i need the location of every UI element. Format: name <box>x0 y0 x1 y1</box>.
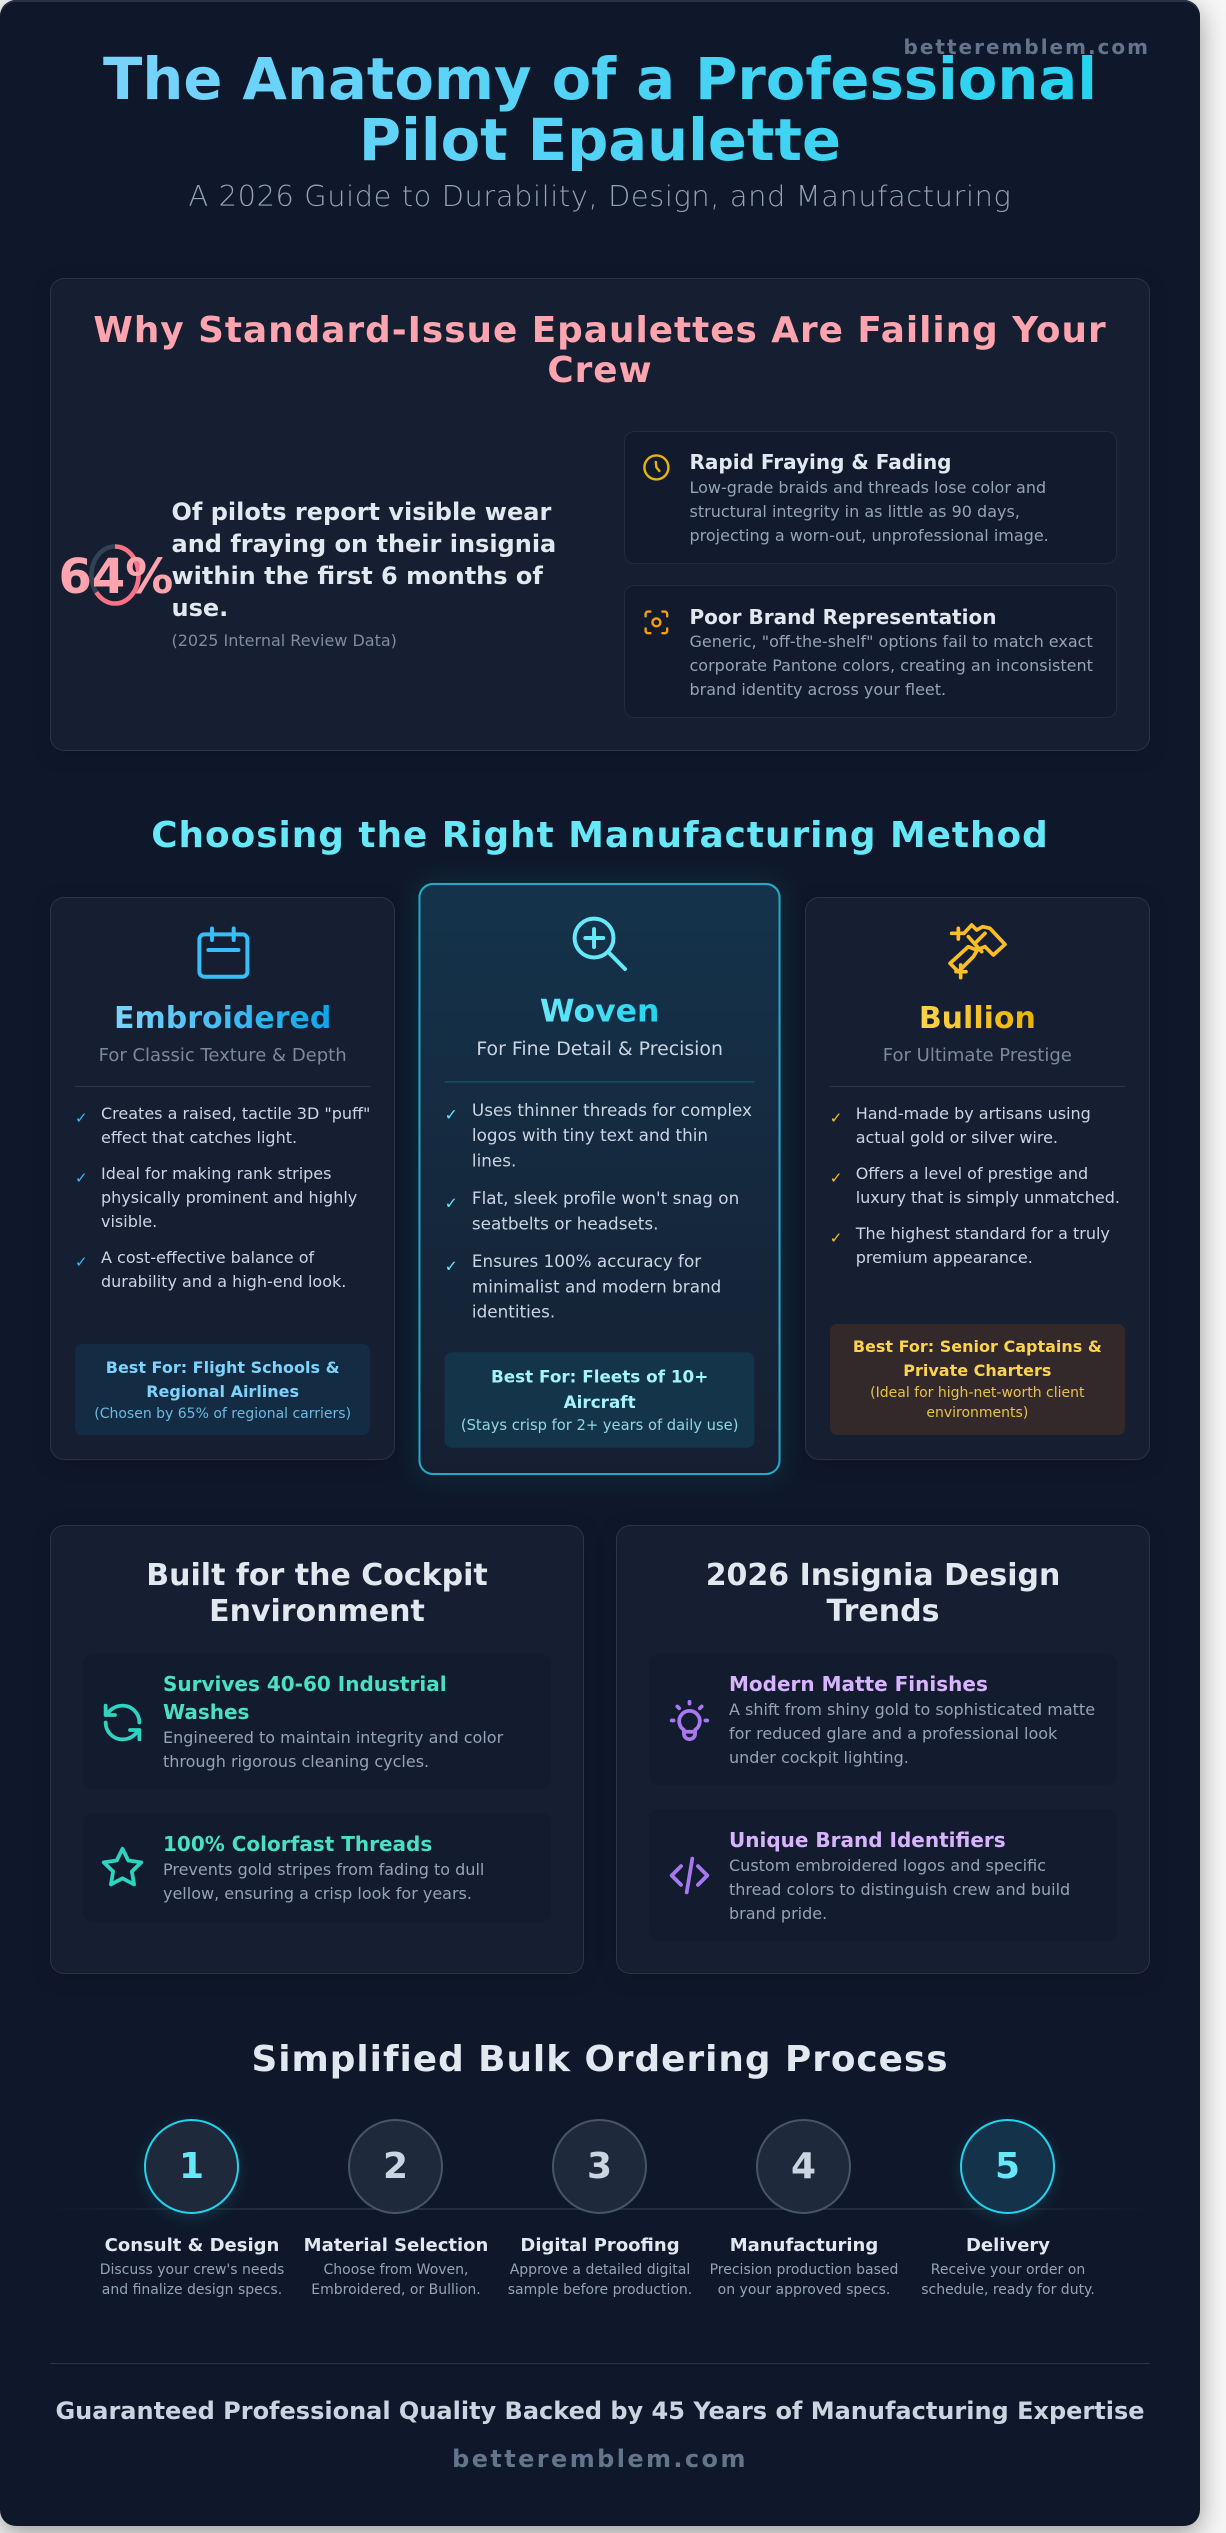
feature list: visible. <box>101 1212 157 1230</box>
method title: Bullion <box>919 1001 1036 1036</box>
issue card: poor brand representation <box>624 585 1116 718</box>
trend description: brand pride. <box>729 1904 827 1922</box>
step description: Receive your order on <box>931 2262 1085 2278</box>
best for callout: environments) <box>926 1405 1028 1421</box>
footer brand: betteremblem.com <box>452 2445 748 2473</box>
feature title: 100% Colorfast Threads <box>163 1832 432 1856</box>
icon: light bulb <box>670 1700 710 1742</box>
best for callout: Best For: Flight Schools & <box>106 1358 340 1376</box>
panel heading: Built for the Cockpit <box>146 1558 488 1593</box>
panel heading: Trends <box>826 1594 940 1629</box>
issue description <box>690 632 1093 699</box>
feature description: yellow, ensuring a crisp look for years. <box>163 1884 472 1902</box>
feature list: ✓ <box>830 1108 842 1126</box>
feature list: logos with tiny text and thin <box>472 1125 708 1145</box>
step description: sample before production. <box>508 2282 692 2298</box>
step description <box>100 2262 284 2298</box>
panel heading: Environment <box>209 1594 425 1629</box>
step description <box>508 2262 692 2298</box>
title: The Anatomy of a Professional <box>103 46 1097 113</box>
trend title: Modern Matte Finishes <box>729 1672 988 1696</box>
step number 1: 1 <box>179 2146 204 2187</box>
feature list: Uses thinner threads for complex <box>472 1100 752 1120</box>
feature list: Hand-made by artisans using <box>856 1104 1091 1122</box>
icon: refresh <box>104 1704 142 1742</box>
panel: built for the cockpit <box>50 1525 584 1974</box>
best for callout: Private Charters <box>903 1361 1051 1380</box>
feature description: Prevents gold stripes from fading to dull <box>163 1860 484 1878</box>
best for callout: Regional Airlines <box>146 1382 299 1400</box>
feature list: ✓ <box>830 1228 842 1246</box>
best for callout: (Chosen by 65% of regional carriers) <box>94 1406 351 1422</box>
step title: Manufacturing <box>730 2235 878 2256</box>
step number 3 <box>552 2119 647 2214</box>
icon: magnifier <box>572 916 628 972</box>
step description: Discuss your crew's needs <box>100 2262 284 2278</box>
stat description: and fraying on their insignia <box>172 530 556 558</box>
stat description: use. <box>172 594 228 622</box>
issue title: Rapid Fraying & Fading <box>690 450 952 474</box>
title: Pilot Epaulette <box>359 107 841 174</box>
step description: schedule, ready for duty. <box>921 2282 1095 2298</box>
step 3 <box>508 2119 692 2298</box>
feature list <box>830 1104 1120 1266</box>
card: woven (featured) <box>419 882 781 1474</box>
step number 3: 3 <box>587 2146 612 2187</box>
icon: scan <box>644 610 668 634</box>
section heading <box>93 310 1107 390</box>
feature list: luxury that is simply unmatched. <box>856 1188 1120 1206</box>
trend description: for reduced glare and a professional look <box>729 1724 1057 1742</box>
feature description: through rigorous cleaning cycles. <box>163 1752 429 1770</box>
step number 4: 4 <box>791 2146 816 2187</box>
feature title: Survives 40-60 Industrial <box>163 1672 447 1696</box>
trend description: under cockpit lighting. <box>729 1748 909 1766</box>
issue description: brand identity across your fleet. <box>690 680 946 699</box>
method subtitle: For Fine Detail & Precision <box>477 1038 723 1060</box>
best for callout: Best For: Fleets of 10+ <box>491 1366 709 1386</box>
trend description <box>729 1700 1095 1766</box>
feature list: Ideal for making rank stripes <box>101 1164 331 1182</box>
feature description <box>163 1728 504 1770</box>
method subtitle: For Ultimate Prestige <box>883 1044 1072 1066</box>
best for callout: Best For: Senior Captains & <box>853 1337 1102 1356</box>
best for callout: (Stays crisp for 2+ years of daily use) <box>461 1416 739 1433</box>
section heading: Why Standard-Issue Epaulettes Are Failing Your <box>93 310 1107 350</box>
feature list: ✓ <box>75 1168 88 1186</box>
stat description: within the first 6 months of <box>172 562 543 590</box>
trend description: Custom embroidered logos and specific <box>729 1856 1046 1874</box>
icon: code <box>670 1856 710 1894</box>
feature list: identities. <box>472 1301 555 1321</box>
feature list: ✓ <box>830 1168 842 1186</box>
issue description: corporate Pantone colors, creating an inconsistent <box>690 656 1093 675</box>
step description: Approve a detailed digital <box>510 2262 690 2278</box>
feature list <box>75 1104 370 1290</box>
step 4 <box>710 2119 898 2298</box>
best for callout <box>445 1352 755 1447</box>
trend description <box>729 1856 1070 1922</box>
panel heading: 2026 Insignia Design <box>706 1558 1060 1593</box>
stat description <box>172 498 556 622</box>
trend: brand identifiers <box>649 1809 1117 1941</box>
feature list: actual gold or silver wire. <box>856 1128 1058 1146</box>
section heading: Crew <box>547 350 653 390</box>
step number 5 <box>960 2119 1055 2214</box>
feature list: lines. <box>472 1150 517 1170</box>
step description <box>710 2262 898 2298</box>
footer guarantee: Guaranteed Professional Quality Backed by 45 Years of Manufacturing Expertise <box>55 2397 1145 2425</box>
trend title: Unique Brand Identifiers <box>729 1828 1006 1852</box>
stat source: (2025 Internal Review Data) <box>172 630 397 650</box>
panel: design trends <box>616 1525 1150 1974</box>
feature list: seatbelts or headsets. <box>472 1213 659 1233</box>
panel heading <box>146 1558 488 1629</box>
watermark: betteremblem.com <box>904 34 1150 58</box>
section heading: bulk ordering: Simplified Bulk Ordering Process <box>251 2039 949 2080</box>
step number 2 <box>348 2119 443 2214</box>
feature list: durability and a high-end look. <box>101 1272 346 1290</box>
card: bullion <box>805 896 1150 1460</box>
step description: Embroidered, or Bullion. <box>311 2282 481 2298</box>
feature list: ✓ <box>445 1193 458 1212</box>
best for callout <box>75 1344 370 1435</box>
step title: Delivery <box>966 2235 1050 2256</box>
section heading: manufacturing method: Choosing the Right Manufacturing Method <box>151 815 1049 856</box>
feature list: ✓ <box>75 1252 88 1270</box>
feature title: Washes <box>163 1700 249 1724</box>
step number 5: 5 <box>995 2146 1020 2187</box>
card: embroidered <box>50 896 395 1460</box>
feature list: effect that catches light. <box>101 1128 297 1146</box>
feature list: ✓ <box>75 1108 88 1126</box>
feature: industrial washes <box>83 1654 551 1789</box>
step description: Precision production based <box>710 2262 898 2278</box>
best for callout: Aircraft <box>564 1391 636 1411</box>
subtitle: A 2026 Guide to Durability, Design, and Manufacturing <box>189 179 1011 213</box>
best for callout <box>830 1324 1125 1435</box>
feature list: ✓ <box>445 1105 458 1124</box>
step description: Choose from Woven, <box>324 2262 468 2278</box>
feature: colorfast threads <box>83 1813 551 1922</box>
feature list: A cost-effective balance of <box>101 1248 314 1266</box>
step 1 <box>100 2119 284 2298</box>
method title: Embroidered <box>114 1001 331 1036</box>
step description <box>311 2262 481 2298</box>
feature description: Engineered to maintain integrity and color <box>163 1728 503 1746</box>
trend description: A shift from shiny gold to sophisticated matte <box>729 1700 1095 1718</box>
icon: calendar <box>197 926 250 979</box>
best for callout: (Ideal for high-net-worth client <box>870 1385 1085 1401</box>
step title: Consult & Design <box>105 2235 279 2256</box>
feature list: minimalist and modern brand <box>472 1276 722 1296</box>
step description: on your approved specs. <box>718 2282 890 2298</box>
step description <box>921 2262 1095 2298</box>
method title: Woven <box>540 992 660 1029</box>
icon: clock <box>643 454 670 481</box>
panel: why standard-issue epaulettes fail <box>50 278 1150 751</box>
title <box>50 50 1150 171</box>
stat: 64 percent donut: 64% <box>58 549 173 605</box>
step title: Material Selection <box>304 2235 488 2256</box>
issue description: Generic, "off-the-shelf" options fail to match exact <box>690 632 1093 651</box>
trend description: thread colors to distinguish crew and build <box>729 1880 1070 1898</box>
step description: and finalize design specs. <box>102 2282 282 2298</box>
issue description: structural integrity in as little as 90 days, <box>690 502 1020 520</box>
trend: matte finishes <box>649 1654 1117 1785</box>
feature list: Ensures 100% accuracy for <box>472 1251 701 1271</box>
feature list: premium appearance. <box>856 1248 1033 1266</box>
stat description: Of pilots report visible wear <box>172 498 551 526</box>
issue card: rapid fraying <box>624 431 1116 564</box>
icon: star <box>102 1846 144 1886</box>
issue description: projecting a worn-out, unprofessional image. <box>690 526 1049 544</box>
step number 4 <box>756 2119 851 2214</box>
feature list: Flat, sleek profile won't snag on <box>472 1188 740 1208</box>
issue description <box>690 478 1049 544</box>
step title: Digital Proofing <box>520 2235 680 2256</box>
issue title: Poor Brand Representation <box>690 604 996 628</box>
process timeline <box>100 2119 1095 2298</box>
step number 1 <box>144 2119 239 2214</box>
feature list: Offers a level of prestige and <box>856 1164 1088 1182</box>
feature list: The highest standard for a truly <box>856 1224 1110 1242</box>
feature list: ✓ <box>445 1256 458 1275</box>
feature description <box>163 1860 484 1902</box>
step 5 <box>921 2119 1095 2298</box>
step 2 <box>304 2119 488 2298</box>
step number 2: 2 <box>383 2146 408 2187</box>
issue description: Low-grade braids and threads lose color and <box>690 478 1046 496</box>
icon: bullion tools <box>948 923 1007 980</box>
feature list: Creates a raised, tactile 3D "puff" <box>101 1104 370 1122</box>
panel heading <box>706 1558 1060 1629</box>
method subtitle: For Classic Texture & Depth <box>99 1044 347 1066</box>
feature title <box>163 1672 447 1724</box>
feature list: physically prominent and highly <box>101 1188 357 1206</box>
feature list <box>445 1100 752 1321</box>
